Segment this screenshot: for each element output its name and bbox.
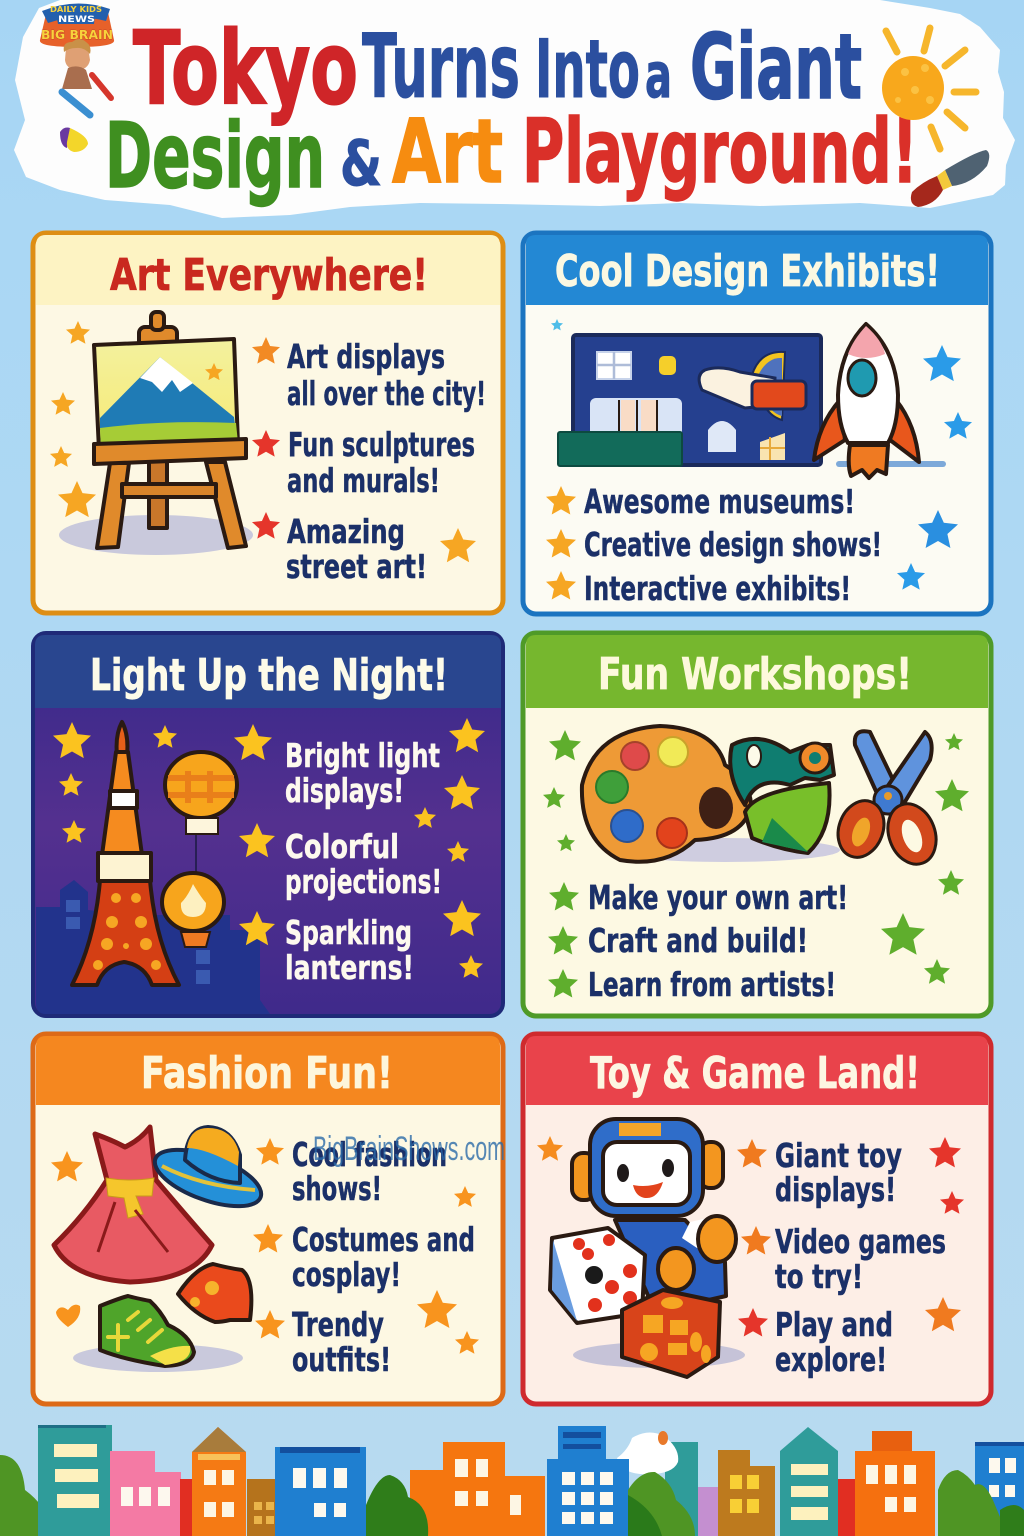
text: fashion list: cosplay!: [292, 1255, 401, 1294]
text: toy list: displays!: [775, 1170, 896, 1209]
text: toy list: explore!: [775, 1340, 887, 1379]
title banner brush stroke: [14, 0, 1015, 218]
text: workshops list: Craft and build!: [588, 921, 808, 960]
heading: Fun Workshops!: [598, 649, 912, 700]
heading: Light Up the Night!: [90, 650, 448, 701]
text: exhibits list: [584, 482, 882, 608]
panel: Fashion Fun: [33, 1034, 503, 1404]
bullets and sparkles: [50, 321, 476, 562]
text: workshops list: Learn from artists!: [588, 965, 836, 1004]
text: exhibits list: Awesome museums!: [584, 482, 855, 521]
paint blob near title: [60, 128, 88, 152]
trees: [366, 1470, 1024, 1536]
heading: Fashion Fun!: [141, 1048, 393, 1099]
logo: Daily Kids News Big Brain: NEWS: [58, 15, 95, 25]
icon: Tokyo tower: [72, 722, 179, 985]
watermark: BigBrainShows.com: [313, 1130, 505, 1168]
text: toy list: [775, 1136, 946, 1379]
left tree: [0, 1455, 50, 1536]
text: toy list: Video games: [775, 1222, 946, 1261]
text: fashion list: shows!: [292, 1169, 382, 1208]
text: fashion list: Costumes and: [292, 1220, 475, 1259]
boy mascot: [62, 39, 92, 89]
bullets and sparkles: [537, 1136, 964, 1336]
icon: palette and scissors: [582, 726, 944, 871]
text: toy list: Giant toy: [775, 1136, 902, 1175]
text: toy list: Play and: [775, 1305, 893, 1344]
text: light list: displays!: [285, 771, 404, 810]
text: art list: and murals!: [287, 461, 440, 500]
icon: sun: [882, 28, 976, 149]
text: workshops list: Make your own art!: [588, 878, 848, 917]
text: workshops list: [588, 878, 848, 1004]
text: exhibits list: Creative design shows!: [584, 525, 882, 564]
text: exhibits list: Interactive exhibits!: [584, 569, 851, 608]
text: light list: Bright light: [285, 736, 440, 775]
text: art list: Art displays: [287, 337, 445, 376]
panel: Art Everywhere: [33, 233, 503, 613]
text: fashion list: Trendy: [292, 1305, 384, 1344]
text: fashion list: outfits!: [292, 1340, 391, 1379]
text: light list: Sparkling: [285, 913, 412, 952]
text: art list: all over the city!: [287, 374, 486, 413]
crayons: [62, 75, 111, 115]
text: light list: projections!: [285, 862, 442, 901]
text: light list: [285, 736, 442, 987]
scattered shapes: [51, 1138, 479, 1354]
text: toy list: to try!: [775, 1257, 863, 1296]
icon: dress, hat, scarf and shoes: [51, 1127, 479, 1372]
heading: Art Everywhere!: [110, 250, 428, 301]
skyline: buildings and trees: [0, 1425, 1024, 1536]
city silhouette: [36, 880, 270, 1014]
icon: robot with dice and cube: [550, 1119, 745, 1377]
stars: [53, 718, 485, 978]
text: light list: lanterns!: [285, 948, 414, 987]
title: &: [340, 127, 382, 200]
title: Tokyo: [133, 9, 358, 127]
panel: Fun Workshops: [523, 633, 991, 1016]
title: Turns: [362, 15, 520, 118]
logo: Daily Kids News Big Brain: [40, 3, 114, 115]
text: fashion list: [292, 1135, 475, 1379]
text: fashion list: Cool fashion: [292, 1135, 447, 1174]
bullets and sparkles: [543, 730, 969, 998]
text: art list: street art!: [286, 547, 427, 586]
logo: Daily Kids News Big Brain: DAILY KIDS: [50, 5, 102, 14]
icon: museum exhibit with rocket: [558, 324, 946, 478]
icon: easel with mountain painting: [59, 312, 253, 555]
icon: paint brush: [911, 150, 989, 207]
title: Giant: [690, 15, 862, 120]
title: Art: [392, 100, 503, 203]
logo: Daily Kids News Big Brain: BIG BRAIN: [41, 27, 113, 42]
text: art list: Fun sculptures: [288, 425, 475, 464]
panel: Cool Design Exhibits: [523, 233, 991, 614]
bullets and sparkles: [546, 319, 972, 600]
text: art list: [286, 337, 486, 586]
panel: Toy & Game Land: [523, 1034, 991, 1404]
title: a: [645, 39, 672, 112]
text: light list: Colorful: [285, 827, 399, 866]
title: Into: [535, 23, 640, 116]
title: Design: [105, 104, 325, 209]
title: [105, 9, 918, 209]
panel: Light Up the Night: [33, 633, 503, 1016]
text: art list: Amazing: [287, 512, 405, 551]
icon: paper lanterns: [162, 752, 237, 947]
